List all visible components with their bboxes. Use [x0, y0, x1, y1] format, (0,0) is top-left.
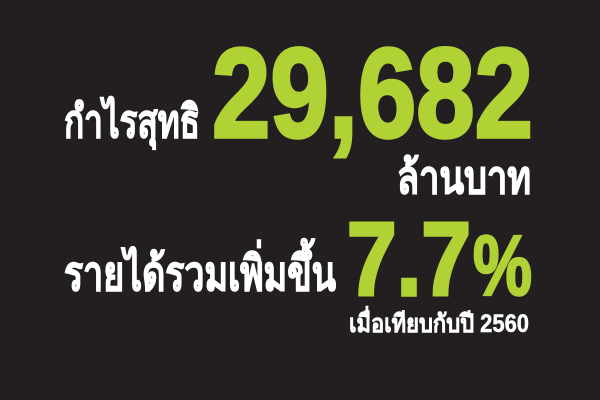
figure: net profit value: 29,682 [212, 22, 533, 164]
label: net profit: กำไรสุทธิ [64, 95, 200, 150]
note: compared with year 2560: เมื่อเทียบกับปี 2560 [349, 306, 529, 338]
label: total revenue increase: รายได้รวมเพิ่มขึ้น [64, 238, 336, 301]
unit: million baht: ล้านบาท [397, 152, 531, 203]
figure: revenue growth percentage: 7.7 [347, 202, 471, 318]
figure: revenue growth percentage: % [473, 219, 532, 314]
